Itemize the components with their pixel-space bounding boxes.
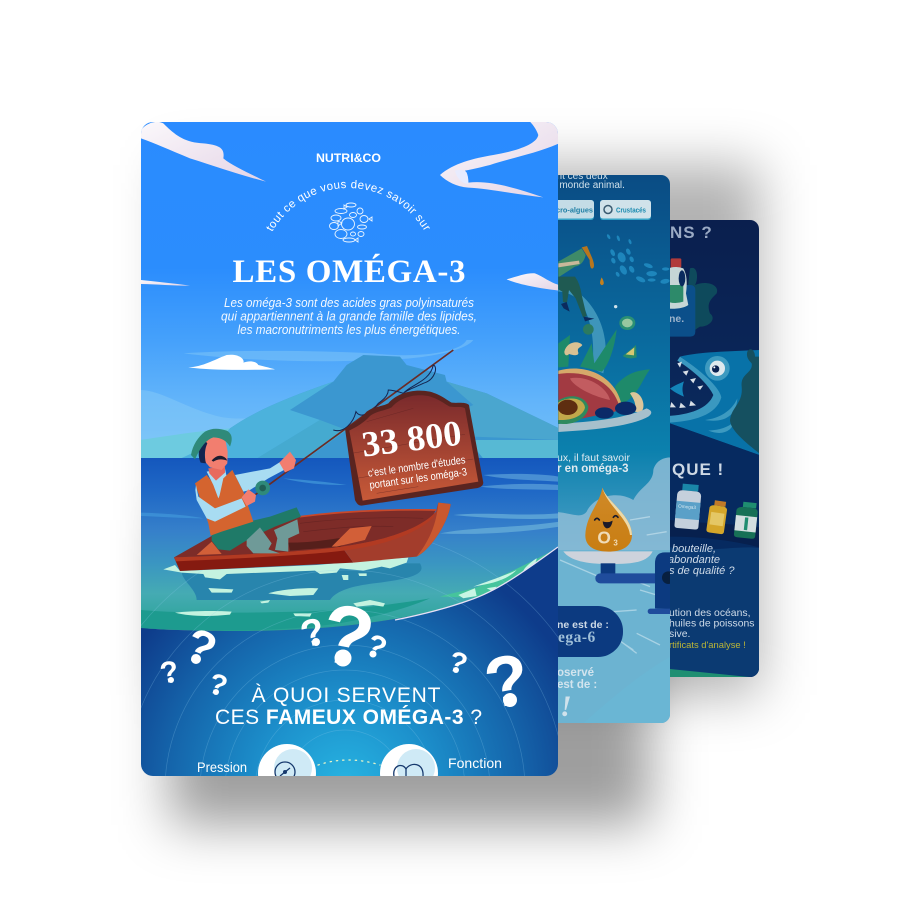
illustration: shark xyxy=(670,349,759,455)
moustache xyxy=(212,456,227,462)
text block: ocean pollution: ution des océans, xyxy=(669,608,750,619)
label: fonction cardiaque: Fonction xyxy=(448,755,502,771)
button: crustacés: Crustacés xyxy=(616,206,646,214)
hands xyxy=(242,452,296,506)
text: balance intro: ux, il faut savoir xyxy=(557,452,630,464)
question marks: ? xyxy=(296,610,330,657)
callout pill: oméga-6 ratio: ega-6 xyxy=(558,629,596,646)
text: observed ratio: est de : xyxy=(557,679,597,691)
illustration: balance scale xyxy=(564,551,670,614)
illustration: detergent bottle and seaweed xyxy=(670,258,717,337)
panel: middle card, food and balance page xyxy=(558,175,670,723)
intro paragraph: les macronutriments les plus énergétiques. xyxy=(238,323,460,337)
sign caption: c'est le nombre d'études xyxy=(367,454,467,480)
hair xyxy=(199,441,207,463)
text: observed ratio: oservé xyxy=(557,667,594,679)
section heading xyxy=(215,684,482,729)
icon: heart xyxy=(380,744,438,802)
icon: smiling omega-3 oil drop: O xyxy=(597,527,611,547)
question marks: ? xyxy=(178,617,224,677)
lower section background xyxy=(670,427,759,677)
drop shadow xyxy=(170,165,760,825)
logo: NUTRI&CO xyxy=(316,153,381,165)
title: LES OMÉGA-3 xyxy=(232,253,466,290)
label: fonction cardiaque xyxy=(448,755,550,789)
illustration: supplement bottles: Omega3 xyxy=(678,504,697,510)
text block: ocean pollution: huiles de poissons xyxy=(669,618,754,630)
heading fragment: QUE !: QUE ! xyxy=(672,460,724,479)
boat reflection and foam xyxy=(163,558,422,600)
text: balance intro: r en oméga-3 xyxy=(557,463,629,475)
text block: bottle question: s de qualité ? xyxy=(669,565,735,577)
text block: ocean pollution xyxy=(670,608,754,637)
sea xyxy=(141,458,558,631)
sign caption xyxy=(367,454,468,492)
question marks: ? xyxy=(157,655,181,690)
text block: ocean pollution: sive. xyxy=(669,629,690,640)
reel xyxy=(255,481,270,495)
callout pill: oméga-6 ratio xyxy=(558,606,623,657)
text block: bottle question xyxy=(668,543,735,577)
button: crustacés xyxy=(600,200,651,220)
panel background details: cloud and rays xyxy=(558,458,670,723)
icon: smiling omega-3 oil drop: 3 xyxy=(613,538,618,547)
wooden sign: 33 800 xyxy=(345,391,483,506)
icon: ball of fish xyxy=(330,203,372,242)
panel: main card, les oméga-3 xyxy=(141,122,558,776)
illustration: school of fish xyxy=(606,234,670,284)
text: intro fragment: ent ces deux xyxy=(551,171,608,182)
text: intro fragment xyxy=(558,175,624,188)
section heading: À QUOI SERVENT xyxy=(252,684,441,707)
text: certificates of analysis: rtificats d'analyse ! xyxy=(669,639,746,650)
label: pression artérielle: artérielle xyxy=(200,774,254,790)
curved subtitle: tout ce que vous devez savoir sur xyxy=(266,180,430,231)
question marks: ? xyxy=(204,667,231,703)
mountains xyxy=(140,355,559,459)
sign caption: portant sur les oméga-3 xyxy=(369,466,468,492)
icon: smiling omega-3 oil drop xyxy=(585,488,632,552)
sky xyxy=(141,122,558,462)
question marks: ? xyxy=(479,639,535,725)
trousers xyxy=(212,507,301,551)
button: micro-algues xyxy=(558,200,594,220)
sky light bands xyxy=(141,340,473,440)
heading fragment, rear card top: NS ? xyxy=(670,223,713,242)
label: pression artérielle xyxy=(197,759,254,790)
boat xyxy=(174,503,451,571)
sea light bands xyxy=(140,474,559,534)
wave crest xyxy=(441,552,550,598)
illustration: supplement bottles xyxy=(670,483,759,547)
dotted connector between benefits xyxy=(318,760,380,765)
text block: bottle question: bouteille, xyxy=(672,543,716,555)
hat xyxy=(191,429,232,459)
face xyxy=(205,437,228,470)
round dots of question marks xyxy=(168,638,517,707)
shirt arms xyxy=(235,462,284,492)
question marks: ? xyxy=(360,627,392,666)
question marks xyxy=(157,585,535,725)
illustration: food plate with steak, avocado and chef xyxy=(558,246,651,432)
boots xyxy=(247,519,299,553)
text: balance intro xyxy=(558,454,630,474)
intro paragraph: qui appartiennent à la grande famille des lipides, xyxy=(221,310,477,324)
icon: blood pressure xyxy=(258,744,316,802)
button: micro-algues: cro-algues xyxy=(556,206,593,214)
text block: bottle question: abondante xyxy=(668,554,720,566)
fishing rod and line xyxy=(255,350,453,495)
section heading: CES FAMEUX OMÉGA-3 ? xyxy=(215,706,482,729)
shirt collar xyxy=(207,468,227,498)
illustration: fisherman xyxy=(191,429,301,553)
intro paragraph: Les oméga-3 sont des acides gras polyinsaturés xyxy=(224,296,474,310)
text fragment: ne.: ne. xyxy=(669,313,684,325)
question marks: ? xyxy=(313,585,382,687)
small cloud near mountain xyxy=(188,355,275,370)
label: fonction cardiaque: cardiaque (1) xyxy=(448,773,550,789)
vest front panel xyxy=(219,470,243,507)
callout pill: oméga-6 ratio: ne est de : xyxy=(557,619,609,631)
neck xyxy=(208,467,225,481)
text: intro fragment: e monde animal. xyxy=(551,180,625,191)
question marks: ? xyxy=(444,645,471,681)
clouds xyxy=(141,122,559,291)
sign number: 33 800 xyxy=(359,413,464,465)
intro paragraph xyxy=(221,296,477,337)
deep water with concentric rings xyxy=(141,542,558,776)
panel: rear card, shark page xyxy=(670,220,759,677)
icon: exclamation mark: ! xyxy=(560,690,572,723)
lower wave teal bands xyxy=(141,598,430,631)
label: pression artérielle: Pression xyxy=(197,759,247,775)
text: observed ratio xyxy=(558,667,596,688)
vest xyxy=(195,470,253,536)
